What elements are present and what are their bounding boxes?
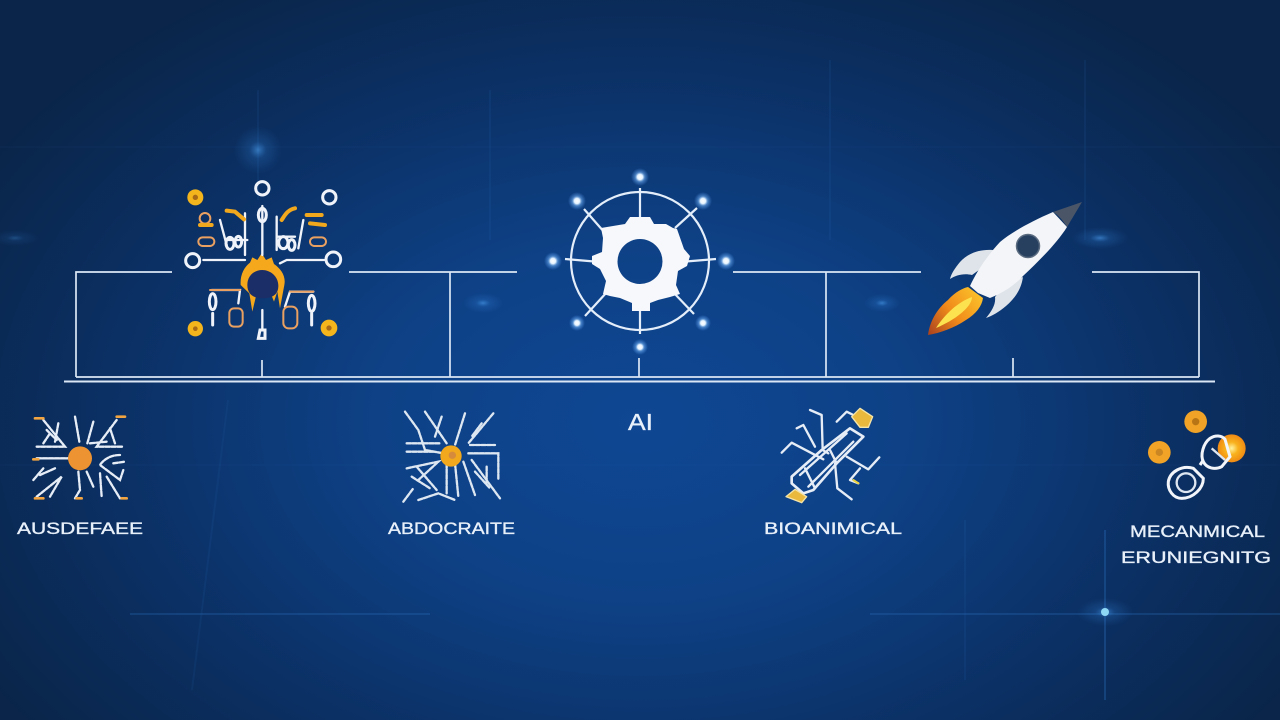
label: AUSDEFAEE: [17, 519, 143, 538]
label: BIOANIMICAL: [764, 519, 902, 538]
icon: rocket: [928, 202, 1082, 335]
label line 1: MECANMICAL: [1130, 522, 1265, 541]
fin lower: [986, 277, 1023, 318]
gear ring: [571, 192, 709, 330]
label: ABDOCRAITE: [388, 519, 515, 538]
gear nodes: [544, 168, 735, 355]
gear spokes: [565, 188, 716, 334]
fin upper: [950, 250, 993, 279]
icon: [1148, 410, 1246, 498]
icon: neural circuit with orange core: [186, 182, 341, 338]
icon: [782, 408, 879, 503]
nose cone: [1053, 202, 1082, 227]
background glows: [0, 126, 1133, 626]
step: middle-left icon and label: [388, 412, 515, 538]
icon: [33, 417, 127, 498]
step: mechanical engineering icon and label: [1121, 410, 1271, 567]
gear body: [592, 217, 690, 311]
flame: [928, 287, 983, 335]
core: [440, 445, 462, 467]
AI label: AI: [628, 409, 653, 435]
icon: central gear with nodes: [544, 168, 735, 355]
label line 2: ERUNIEGNITG: [1121, 548, 1271, 567]
core dark centre: [247, 270, 278, 298]
core: [68, 446, 92, 470]
icon: [403, 412, 500, 502]
core burst: [241, 253, 285, 312]
step: aerospace icon and label: [17, 417, 143, 538]
body: [970, 212, 1067, 298]
step: biomechanical icon and label: [764, 408, 902, 538]
window: [1016, 234, 1040, 258]
timeline frame: [64, 272, 1215, 382]
